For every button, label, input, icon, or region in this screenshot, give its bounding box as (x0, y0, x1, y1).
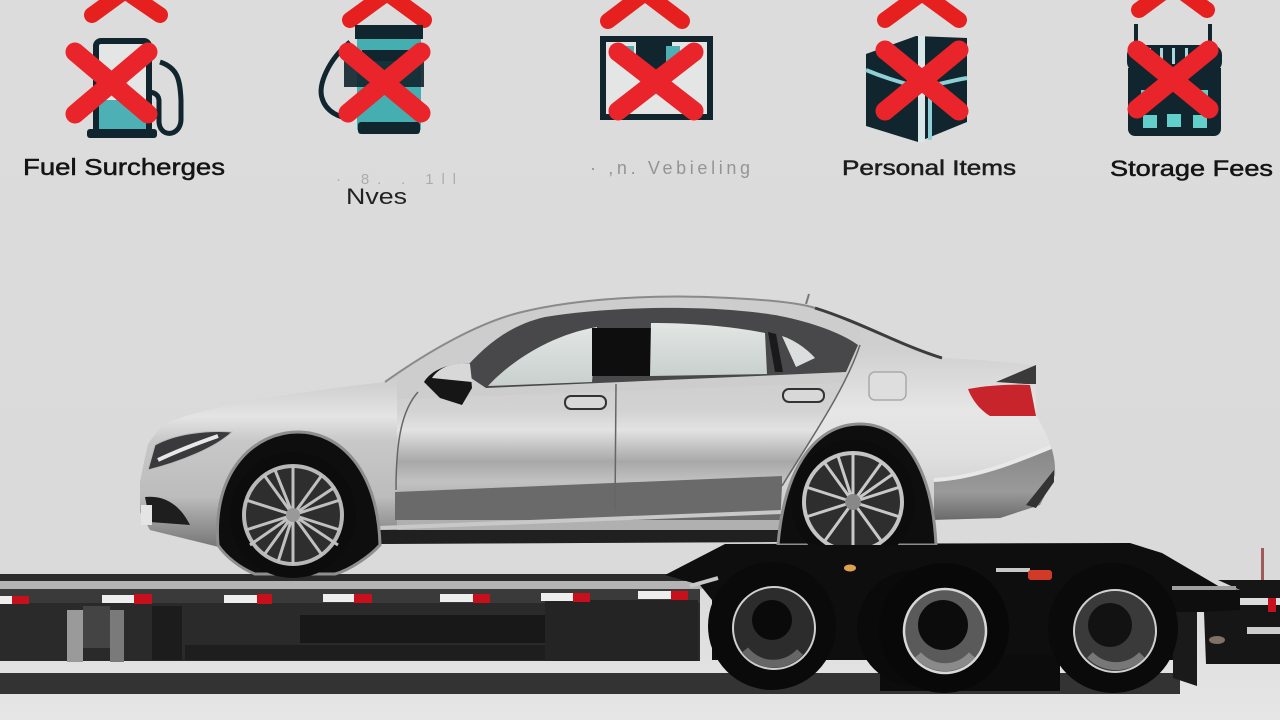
truck wheel 1 (708, 562, 836, 690)
side mirror (424, 364, 472, 405)
icon: top chevron (608, 0, 682, 21)
label: personal items: Personal Items (842, 157, 1016, 180)
window surround (462, 308, 858, 388)
icon: red cross (618, 52, 694, 111)
icon: second fee (321, 0, 456, 209)
front grille (145, 497, 190, 525)
icon: fuel surcharges (23, 0, 225, 180)
icon: third fee (590, 0, 750, 178)
truck wheel 2 inner tyre (857, 570, 973, 686)
tail section (1204, 548, 1280, 664)
red marker light (1028, 570, 1052, 580)
icon: framed box (603, 39, 710, 117)
label: third fee: · ,n. Vebieling (590, 158, 750, 178)
icon: fuel pump (87, 41, 181, 138)
front window (488, 327, 597, 386)
trailer deck (0, 574, 720, 662)
icon: top chevron (350, 0, 424, 20)
door handle rear (783, 389, 824, 402)
roof line (385, 297, 815, 382)
rear wheel and arch (776, 422, 938, 545)
mirror cap (432, 364, 472, 382)
antenna (806, 294, 809, 304)
truck wheel 3 (1048, 563, 1178, 693)
label: second fee (336, 171, 456, 209)
side reflectors (0, 591, 688, 604)
icon: top chevron (1139, 0, 1207, 10)
road shadow strip (0, 673, 1180, 694)
rear window edge (815, 308, 942, 358)
trailing edge highlight (1172, 586, 1236, 590)
icon: red cross (75, 52, 148, 114)
door seams (396, 345, 860, 510)
car body (140, 298, 1056, 547)
door handle front (565, 396, 606, 409)
icon: calendar (1127, 24, 1222, 136)
label: second fee: · 8. . 1ll (336, 171, 456, 188)
icon: red cross (348, 52, 421, 113)
raised rear deck (665, 543, 1240, 660)
label: fuel surcharges: Fuel Surcherges (23, 154, 225, 180)
tail light (968, 385, 1036, 416)
pillar (768, 332, 783, 372)
seat silhouette (592, 328, 652, 376)
label: second fee: Nves (346, 184, 407, 209)
rear window (650, 323, 767, 376)
quarter window (782, 336, 815, 367)
exhaust (1026, 470, 1054, 508)
icon: box (866, 36, 967, 142)
amber marker light (844, 564, 856, 572)
flatbed truck (0, 543, 1280, 694)
spoiler (996, 365, 1036, 384)
deck strip highlight (690, 570, 1030, 586)
icon: red cross (885, 50, 959, 111)
icon: top chevron (92, 0, 160, 15)
mud flap (1173, 612, 1197, 686)
wheel arch front (217, 432, 380, 574)
icon: personal items (842, 0, 1016, 180)
truck wheel 2 (879, 563, 1009, 693)
fog plate (141, 505, 152, 525)
silver sedan (130, 290, 1070, 580)
icon: top chevron (885, 0, 959, 20)
headlight (148, 432, 232, 470)
icon: fuel pump (321, 25, 424, 134)
icon: storage fees (1110, 0, 1273, 181)
front wheel (230, 452, 356, 578)
headlight glint (158, 436, 218, 460)
label: storage fees: Storage Fees (1110, 156, 1273, 181)
fuel door (869, 372, 906, 400)
axle block (880, 655, 1060, 691)
icon: red cross (1137, 50, 1209, 109)
